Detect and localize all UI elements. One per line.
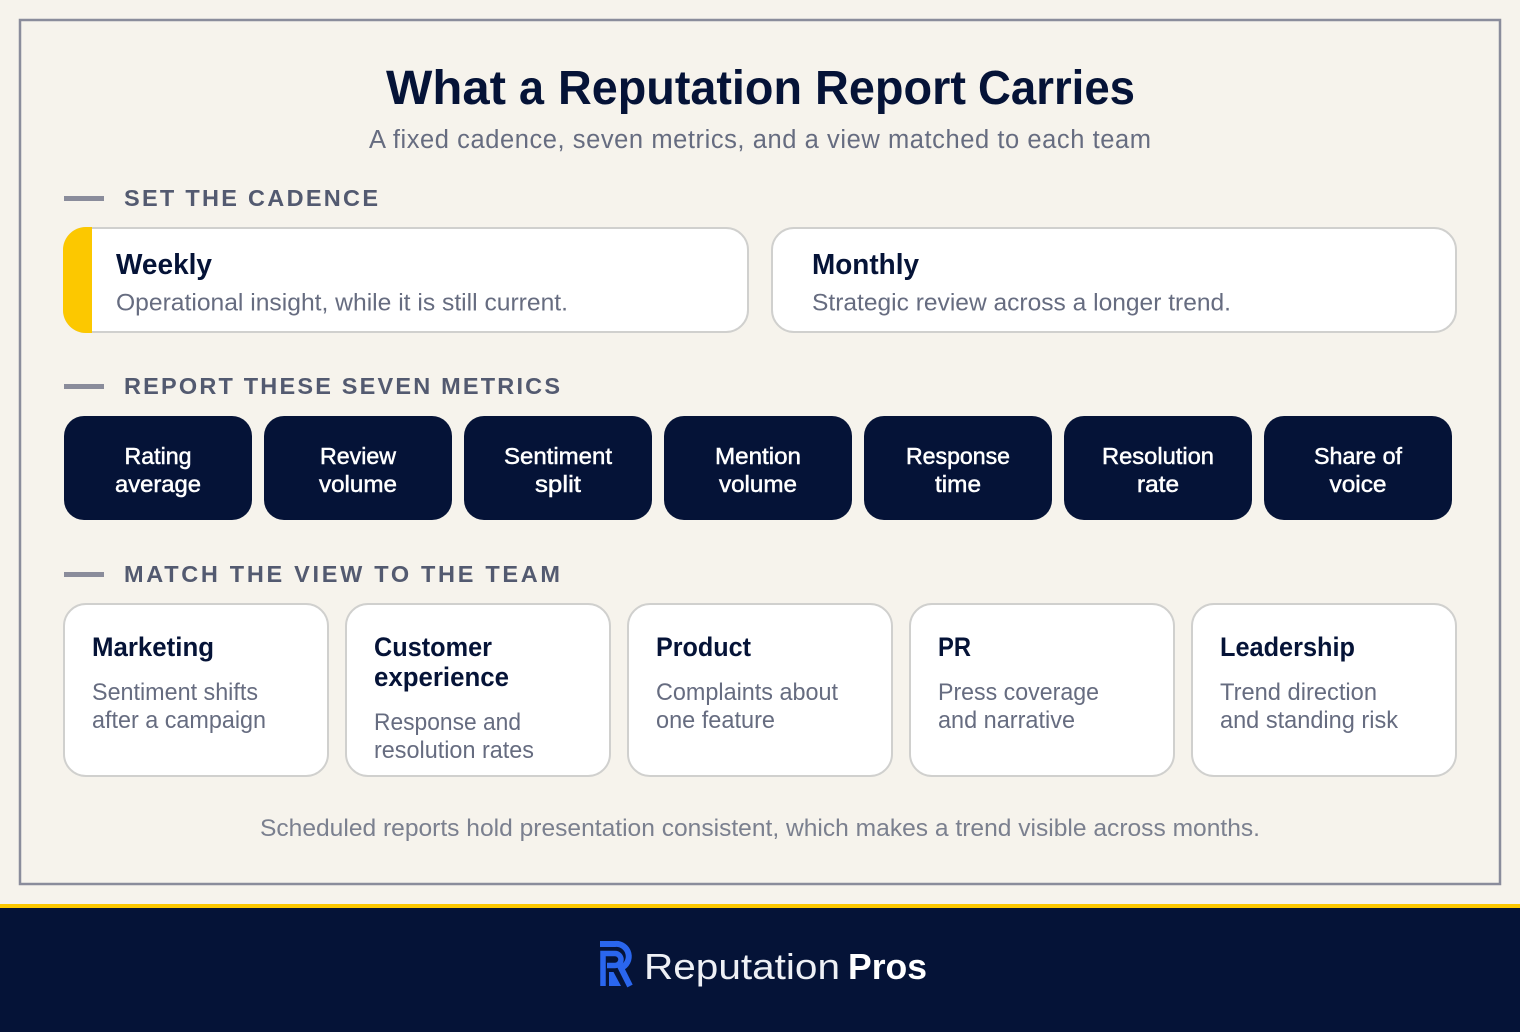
metric: share of voice: voice xyxy=(1330,471,1386,497)
panel: customer experience: experience xyxy=(374,662,509,692)
logo xyxy=(600,944,927,987)
metric: review volume: Review xyxy=(320,443,396,469)
title: Carries xyxy=(978,62,1135,115)
panel: customer experience: resolution rates xyxy=(374,737,534,764)
metric: rating average: Rating xyxy=(124,443,192,469)
metric: mention volume xyxy=(664,416,852,520)
panel: marketing: Marketing xyxy=(92,632,214,662)
footer band xyxy=(0,904,1520,1032)
metric: sentiment split xyxy=(464,416,652,520)
metric: mention volume: Mention xyxy=(715,443,801,469)
metric: review volume: volume xyxy=(319,471,397,497)
metric: resolution rate: rate xyxy=(1137,471,1179,497)
icon: logo mark xyxy=(600,944,630,986)
panel: marketing xyxy=(64,604,328,776)
panel: leadership: Trend direction xyxy=(1220,679,1377,706)
metric: share of voice xyxy=(1264,416,1452,520)
panel: product: Complaints about xyxy=(656,679,838,706)
panel: leadership: and standing risk xyxy=(1220,707,1399,734)
panel: monthly xyxy=(772,228,1456,332)
title: Reputation xyxy=(558,62,802,115)
panel: customer experience: Response and xyxy=(374,709,521,736)
panel: weekly: Weekly xyxy=(116,249,212,281)
metric: sentiment split: split xyxy=(535,471,582,497)
panel: weekly xyxy=(63,227,748,333)
panel: pr: and narrative xyxy=(938,707,1075,734)
panel: weekly: Operational insight, while it is still current. xyxy=(116,290,568,316)
section: metrics: REPORT THESE SEVEN METRICS xyxy=(124,373,560,399)
metric: rating average: average xyxy=(115,471,201,497)
panel: marketing: after a campaign xyxy=(92,707,266,734)
panel: pr: Press coverage xyxy=(938,679,1099,706)
metric: response time: time xyxy=(935,471,981,497)
subtitle: A fixed cadence, seven metrics, and a view matched to each team xyxy=(369,126,1151,154)
title: Report xyxy=(815,62,966,115)
panel: pr: PR xyxy=(938,632,971,662)
metric: resolution rate xyxy=(1064,416,1252,520)
title: What xyxy=(386,62,506,115)
wordmark: Pros xyxy=(848,946,927,987)
panel: customer experience: Customer xyxy=(374,632,492,662)
section: teams: MATCH THE VIEW TO THE TEAM xyxy=(124,561,560,587)
panel: product xyxy=(628,604,892,776)
panel: leadership xyxy=(1192,604,1456,776)
panel: product: one feature xyxy=(656,707,775,734)
metric: share of voice: Share of xyxy=(1314,443,1403,469)
metric: sentiment split: Sentiment xyxy=(504,443,613,469)
panel: leadership: Leadership xyxy=(1220,632,1355,662)
title: a xyxy=(519,62,544,115)
section: cadence: SET THE CADENCE xyxy=(124,185,378,211)
closing note: Scheduled reports hold presentation consistent, which makes a trend visible across months. xyxy=(260,815,1260,842)
wordmark: Reputation xyxy=(644,946,840,987)
panel: marketing: Sentiment shifts xyxy=(92,679,258,706)
panel: customer experience xyxy=(346,604,610,776)
panel: monthly: Strategic review across a longer trend. xyxy=(812,290,1231,316)
metric: mention volume: volume xyxy=(719,471,797,497)
panel: monthly: Monthly xyxy=(812,249,919,281)
metric: response time xyxy=(864,416,1052,520)
metric: review volume xyxy=(264,416,452,520)
metric: resolution rate: Resolution xyxy=(1102,443,1214,469)
panel: pr xyxy=(910,604,1174,776)
metric: response time: Response xyxy=(906,443,1010,469)
metric: rating average xyxy=(64,416,252,520)
panel: product: Product xyxy=(656,632,751,662)
